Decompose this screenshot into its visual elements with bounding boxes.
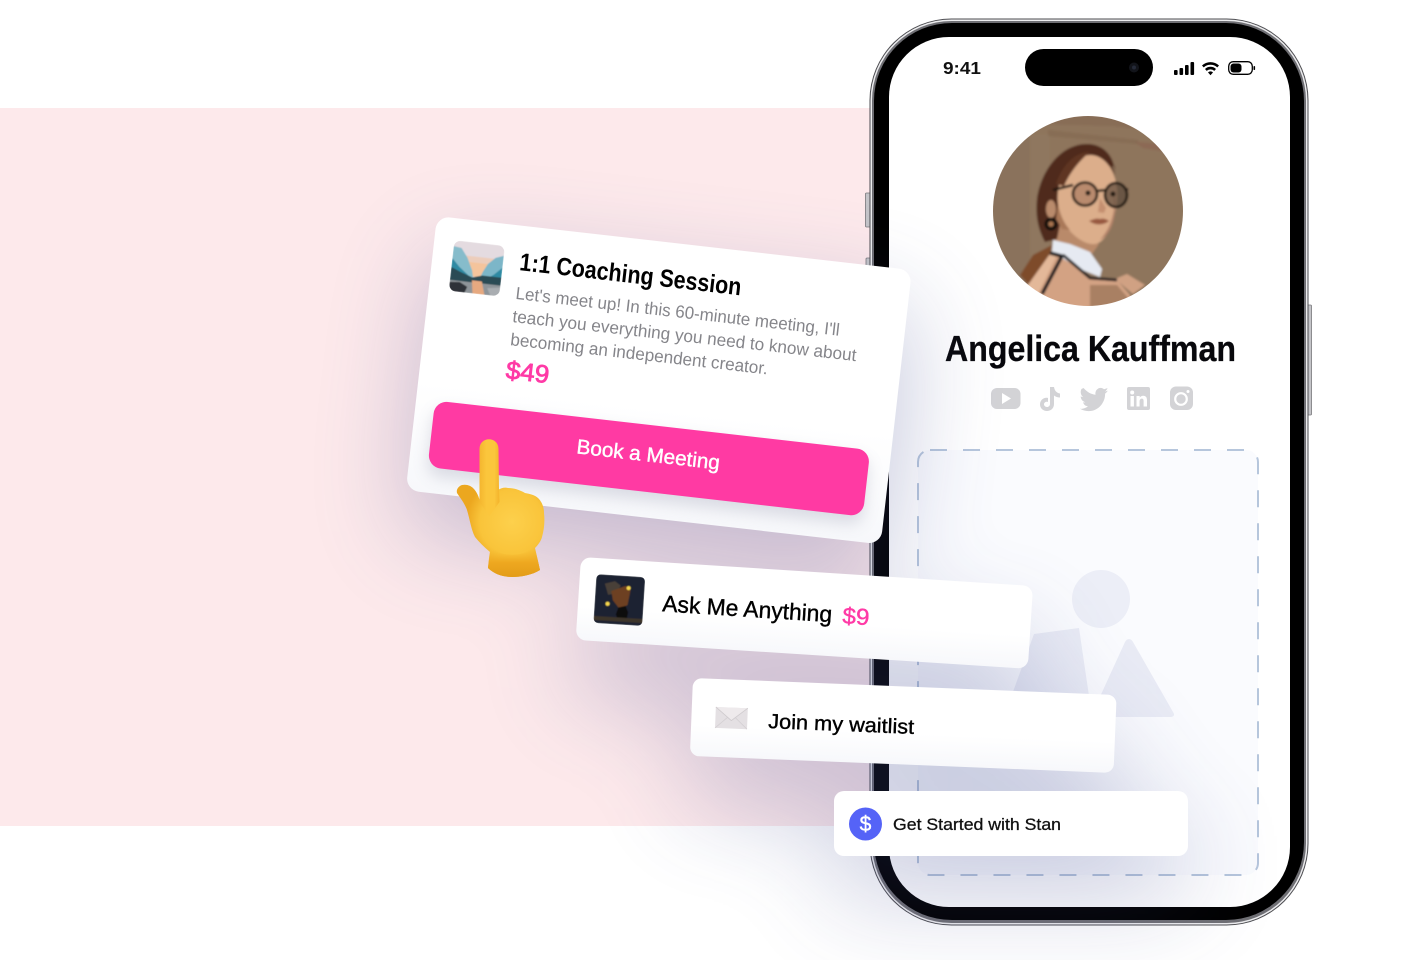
card: get started bbox=[834, 791, 1188, 856]
glasses bbox=[1053, 182, 1128, 207]
icon: envelope bbox=[715, 707, 748, 729]
ponytail bbox=[1020, 245, 1052, 284]
dynamic island bbox=[1025, 49, 1153, 86]
card price: $9 bbox=[842, 602, 870, 630]
face bbox=[1058, 155, 1117, 244]
avatar photo bbox=[993, 116, 1183, 306]
phone frame bbox=[870, 18, 1308, 926]
shoulder bbox=[1038, 254, 1131, 306]
card title: Get Started with Stan bbox=[893, 815, 1061, 834]
lips bbox=[1089, 219, 1109, 224]
image placeholder bbox=[918, 450, 1258, 875]
icon: tiktok bbox=[1040, 387, 1060, 411]
icon: pointing hand bbox=[457, 439, 544, 577]
phone screen bbox=[889, 37, 1290, 907]
card: coaching session bbox=[406, 216, 912, 544]
card description bbox=[509, 283, 860, 388]
profile name: Angelica Kauffman bbox=[945, 328, 1236, 369]
icon: linkedin bbox=[1127, 387, 1150, 410]
card description: Let's meet up! In this 60-minute meeting, I'll bbox=[515, 283, 841, 340]
card title: Join my waitlist bbox=[768, 710, 915, 739]
status time: 9:41 bbox=[943, 58, 981, 78]
icon: instagram bbox=[1170, 386, 1193, 410]
hand bbox=[1115, 274, 1145, 294]
index finger bbox=[480, 439, 500, 516]
hair front bbox=[1056, 152, 1090, 186]
thumbnail: landscape bbox=[449, 240, 505, 297]
card description: teach you everything you need to know about bbox=[512, 306, 858, 365]
straps bbox=[1042, 253, 1062, 294]
icon: youtube bbox=[991, 388, 1020, 409]
card shadows bbox=[405, 255, 1188, 895]
phone side buttons bbox=[866, 193, 1312, 415]
social icons bbox=[991, 386, 1193, 411]
hair back bbox=[1036, 144, 1115, 242]
phone bbox=[866, 18, 1312, 926]
icon: dollar circle: $ bbox=[860, 813, 872, 836]
card title: Ask Me Anything bbox=[662, 590, 833, 627]
card: ask me anything bbox=[576, 557, 1033, 669]
collar bbox=[1052, 240, 1102, 277]
card description: becoming an independent creator. bbox=[509, 329, 769, 378]
icon: twitter bbox=[1080, 388, 1108, 411]
ear bbox=[1046, 200, 1056, 218]
book a meeting button bbox=[428, 400, 870, 517]
earring bbox=[1044, 218, 1058, 230]
button shadow bbox=[427, 409, 869, 525]
status icons bbox=[1174, 62, 1255, 75]
neck bbox=[1054, 226, 1099, 254]
card: join waitlist bbox=[690, 678, 1117, 773]
icon: dollar circle bbox=[849, 808, 882, 840]
card price: $49 bbox=[504, 356, 551, 389]
card title: 1:1 Coaching Session bbox=[518, 248, 743, 301]
pink background band bbox=[0, 108, 880, 826]
thumbnail: dark figure bbox=[593, 574, 645, 626]
book a meeting button: Book a Meeting bbox=[575, 435, 721, 475]
